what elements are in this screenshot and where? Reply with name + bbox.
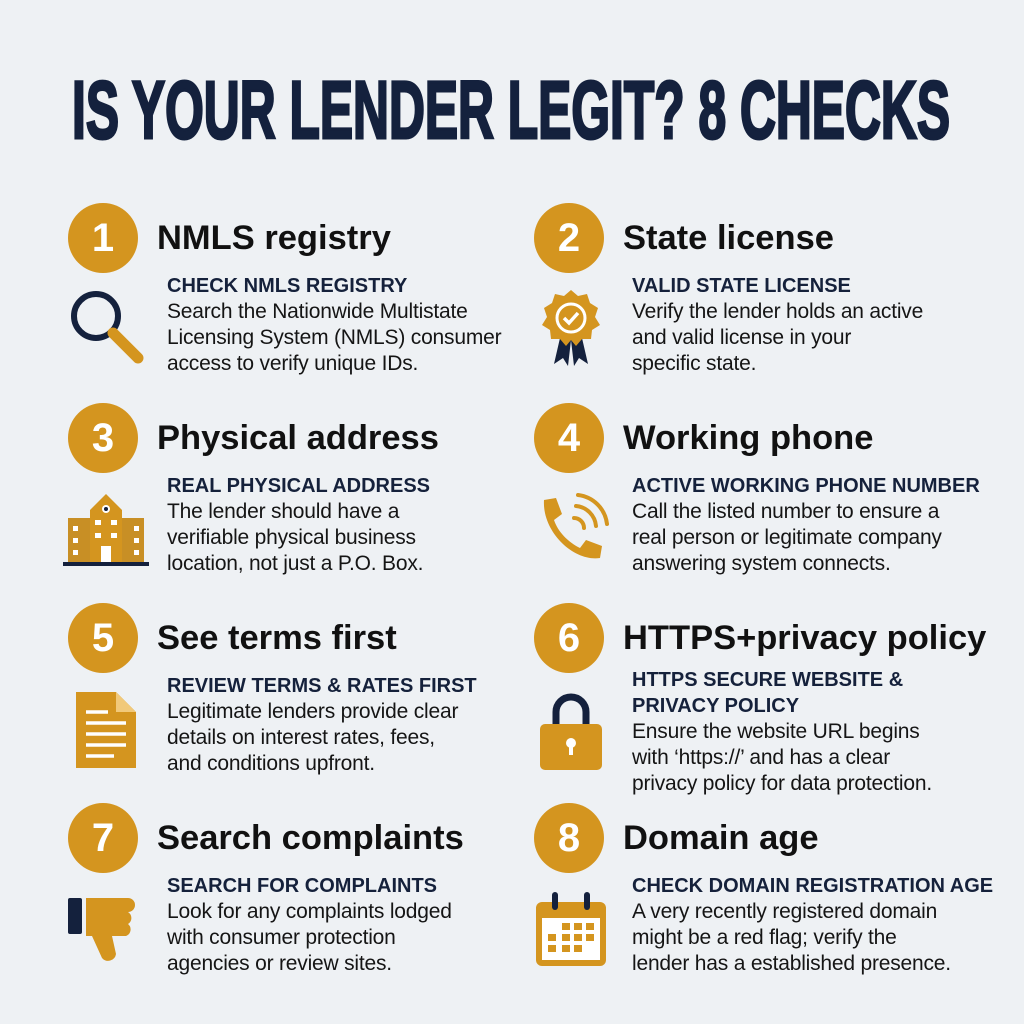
heading 7: Search complaints: [157, 819, 464, 857]
text 2: and valid license in your: [632, 326, 851, 349]
text 2: Verify the lender holds an active: [632, 300, 923, 323]
text 2: specific state.: [632, 352, 756, 375]
text 2: VALID STATE LICENSE: [632, 275, 851, 297]
badge 8: [534, 803, 604, 873]
heading 2: State license: [623, 219, 834, 257]
text 5: REVIEW TERMS & RATES FIRST: [167, 675, 477, 697]
check 2: [534, 203, 923, 375]
icon: thumbs down: [68, 898, 135, 961]
text 5: Legitimate lenders provide clear: [167, 700, 458, 723]
text 6: privacy policy for data protection.: [632, 772, 932, 795]
text 1: [167, 275, 502, 375]
icon: certified seal: [542, 290, 600, 366]
text 7: SEARCH FOR COMPLAINTS: [167, 875, 437, 897]
text 7: [167, 875, 452, 975]
check 1: [68, 203, 502, 375]
text 4: [632, 475, 980, 575]
text 1: CHECK NMLS REGISTRY: [167, 275, 407, 297]
heading 8: Domain age: [623, 819, 819, 857]
text 6: Ensure the website URL begins: [632, 720, 920, 743]
text 1: Search the Nationwide Multistate: [167, 300, 468, 323]
text 5: and conditions upfront.: [167, 752, 375, 775]
check 5: [68, 603, 477, 775]
icon: phone: [544, 493, 609, 558]
check 3: [63, 403, 439, 575]
text 3: verifiable physical business: [167, 526, 416, 549]
badge 7: [68, 803, 138, 873]
text 4: real person or legitimate company: [632, 526, 942, 549]
text 7: Look for any complaints lodged: [167, 900, 452, 923]
text 1: Licensing System (NMLS) consumer: [167, 326, 501, 349]
text 7: agencies or review sites.: [167, 952, 392, 975]
heading 3: Physical address: [157, 419, 439, 457]
badge 7: 7: [92, 816, 114, 860]
text 6: with ‘https://’ and has a clear: [632, 746, 890, 769]
badge 1: 1: [92, 216, 114, 260]
text 4: Call the listed number to ensure a: [632, 500, 939, 523]
text 1: access to verify unique IDs.: [167, 352, 418, 375]
text 4: answering system connects.: [632, 552, 891, 575]
badge 3: [68, 403, 138, 473]
icon: magnifier: [71, 291, 144, 364]
badge 4: 4: [558, 416, 580, 460]
icon: padlock: [540, 694, 602, 770]
check 8: [534, 803, 993, 975]
badge 4: [534, 403, 604, 473]
badge 2: [534, 203, 604, 273]
icon: building: [63, 494, 149, 566]
icon: document: [76, 692, 136, 768]
check 6: [534, 603, 986, 795]
text 8: A very recently registered domain: [632, 900, 937, 923]
text 3: [167, 475, 430, 575]
badge 6: 6: [558, 616, 580, 660]
heading 5: See terms first: [157, 619, 397, 657]
badge 6: [534, 603, 604, 673]
text 6: HTTPS SECURE WEBSITE &: [632, 669, 903, 691]
text 4: ACTIVE WORKING PHONE NUMBER: [632, 475, 980, 497]
heading 4: Working phone: [623, 419, 873, 457]
badge 2: 2: [558, 216, 580, 260]
text 8: lender has a established presence.: [632, 952, 951, 975]
badge 1: [68, 203, 138, 273]
text 8: CHECK DOMAIN REGISTRATION AGE: [632, 875, 993, 897]
text 2: [632, 275, 923, 375]
badge 8: 8: [558, 816, 580, 860]
text 6: [632, 669, 932, 795]
check 7: [68, 803, 464, 975]
text 3: location, not just a P.O. Box.: [167, 552, 423, 575]
heading 1: NMLS registry: [157, 219, 391, 257]
text 8: might be a red flag; verify the: [632, 926, 897, 949]
heading 6: HTTPS+privacy policy: [623, 619, 986, 657]
badge 5: [68, 603, 138, 673]
text 6: PRIVACY POLICY: [632, 695, 799, 717]
badge 3: 3: [92, 416, 114, 460]
icon: calendar: [536, 892, 606, 966]
check 4: [534, 403, 980, 575]
text 3: REAL PHYSICAL ADDRESS: [167, 475, 430, 497]
text 3: The lender should have a: [167, 500, 399, 523]
text 5: details on interest rates, fees,: [167, 726, 435, 749]
badge 5: 5: [92, 616, 114, 660]
text 5: [167, 675, 477, 775]
text 8: [632, 875, 993, 975]
text 7: with consumer protection: [167, 926, 396, 949]
